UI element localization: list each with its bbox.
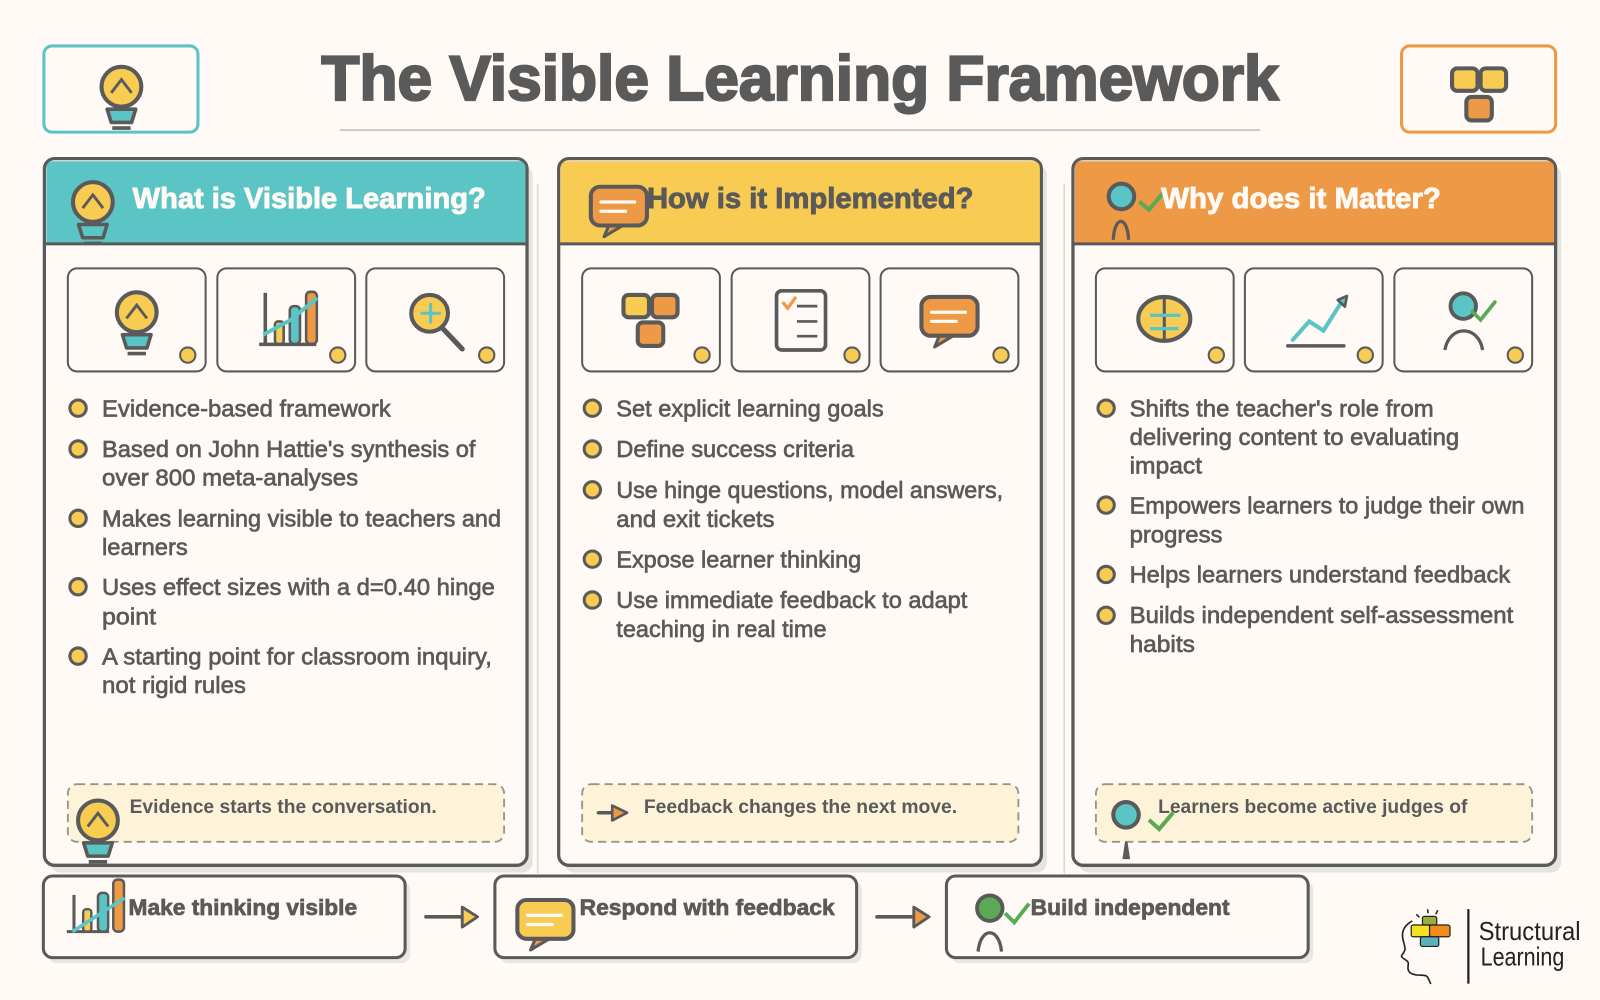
bullet list: delivering content to evaluating (1130, 424, 1459, 450)
bullet list: Helps learners understand feedback (1130, 562, 1510, 588)
bullet list: Makes learning visible to teachers and (102, 506, 501, 532)
bullet list: Based on John Hattie's synthesis of (102, 436, 476, 462)
panel: How is it Implemented? (558, 159, 1047, 872)
icon card: growth chart (1245, 268, 1383, 371)
takeaway: make thinking visible (43, 876, 410, 963)
callout: feedback: Feedback changes the next move. (644, 796, 957, 818)
takeaway: respond with feedback (495, 876, 862, 963)
bullet list: Expose learner thinking (616, 546, 861, 572)
panel header: Why does it Matter?: Why does it Matter? (1161, 183, 1441, 215)
bullet list (1098, 395, 1524, 657)
icon card: checklist (732, 268, 869, 371)
takeaway: make thinking visible: Make thinking visible (129, 895, 357, 920)
bullet list: progress (1130, 521, 1222, 547)
logo: Structural Learning (1401, 909, 1581, 984)
icon card: bar chart (217, 268, 355, 371)
bullet list: point (102, 603, 157, 629)
bullet list: Use immediate feedback to adapt (616, 587, 968, 613)
bullet list: Define success criteria (616, 436, 855, 462)
callout: evidence: Evidence starts the conversation. (130, 796, 437, 818)
arrow (877, 907, 929, 927)
bullet list: A starting point for classroom inquiry, (102, 643, 492, 669)
callout: active judges (1096, 784, 1532, 859)
panel header: What is Visible Learning?: What is Visible Learning? (133, 183, 486, 215)
icon card: magnifier (366, 268, 504, 371)
takeaway: build independent (946, 876, 1313, 963)
icon box: top right blocks (1402, 46, 1556, 132)
bullet list: Builds independent self-assessment (1130, 602, 1514, 628)
icon card: lightbulb (68, 268, 206, 371)
logo: Structural Learning: Learning (1481, 943, 1564, 971)
takeaway: build independent: Build independent (1031, 895, 1230, 920)
icon box: top left lightbulb (44, 46, 198, 132)
bullet list (70, 395, 501, 698)
logo: Structural Learning: Structural (1479, 918, 1581, 946)
bullet list: learners (102, 534, 188, 560)
panel header: What is Visible Learning? (44, 161, 528, 244)
icon card: blocks (582, 268, 720, 371)
panel: What is Visible Learning? (44, 159, 533, 872)
bullet list: Empowers learners to judge their own (1130, 492, 1524, 518)
panel: Why does it Matter? (1072, 159, 1561, 872)
bullet list (584, 395, 1003, 642)
icon card: learner with tick (1394, 268, 1532, 371)
callout: evidence (68, 784, 504, 862)
bullet list: teaching in real time (616, 616, 827, 642)
icon card: speech bubble (881, 268, 1018, 371)
bullet list: Evidence-based framework (102, 395, 391, 421)
bullet list: and exit tickets (616, 506, 774, 532)
bullet list: over 800 meta-analyses (102, 465, 358, 491)
bullet list: Shifts the teacher's role from (1130, 395, 1434, 421)
takeaway: respond with feedback: Respond with feedback (580, 895, 835, 920)
bullet list: Use hinge questions, model answers, (616, 477, 1003, 503)
title: The Visible Learning Framework (321, 44, 1279, 114)
bullet list: not rigid rules (102, 672, 246, 698)
panel header: How is it Implemented? (558, 161, 1042, 244)
icon card: brain (1096, 268, 1234, 371)
bullet list: Set explicit learning goals (616, 395, 884, 421)
arrow (426, 907, 478, 927)
bullet list: habits (1130, 631, 1195, 657)
bullet list: Uses effect sizes with a d=0.40 hinge (102, 574, 495, 600)
callout: active judges: Learners become active judges of (1158, 796, 1468, 818)
callout: feedback (582, 784, 1018, 842)
panel header: How is it Implemented?: How is it Implemented? (647, 183, 973, 215)
panel header: Why does it Matter? (1072, 161, 1557, 244)
bullet list: impact (1130, 452, 1203, 478)
